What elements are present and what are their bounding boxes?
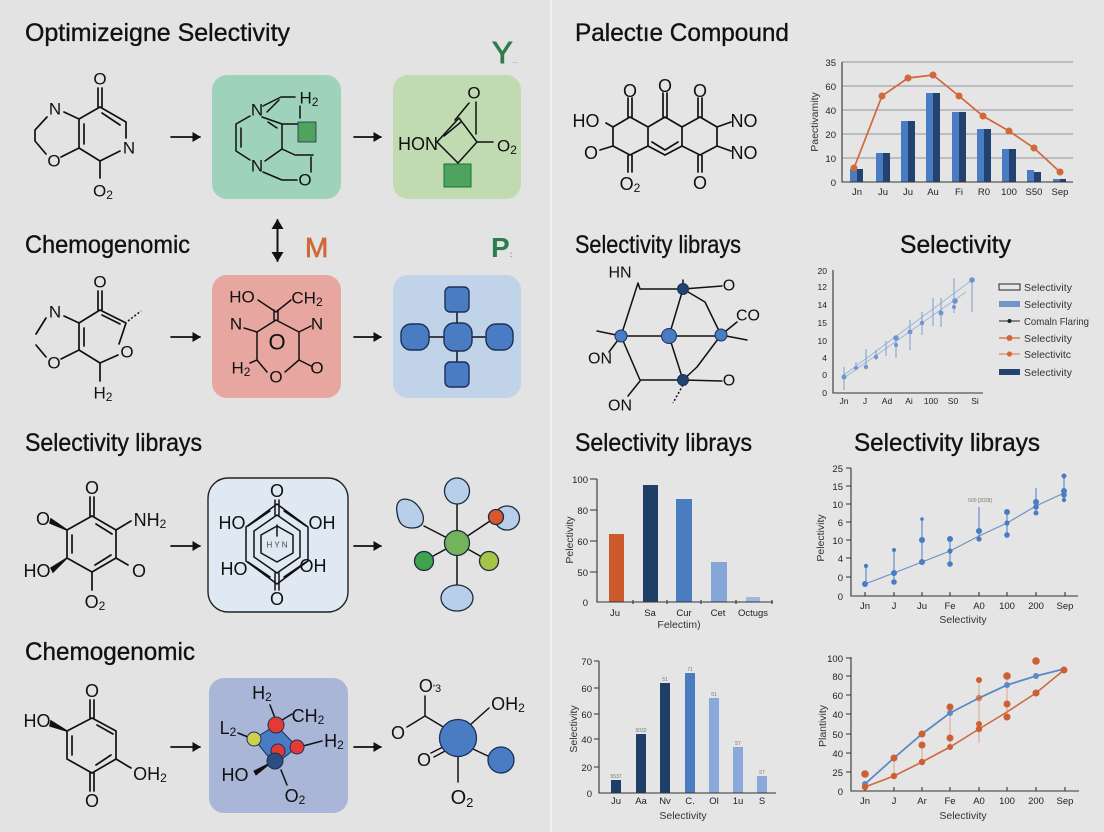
panel: green compound box: O: [298, 170, 312, 190]
arrow: green box to light green box: [354, 136, 381, 138]
chart: two-series line chart: Jn: [860, 796, 870, 807]
molecule: row 4 starting compound: O: [85, 681, 99, 701]
panel: periwinkle compound box: 2: [337, 738, 344, 752]
chart: five-bar chart: 100: [572, 475, 588, 486]
chart: five-bar chart: Cur: [676, 608, 692, 619]
chart: combo bar and line: 60: [825, 82, 836, 93]
chart: two-series line chart: Selectivity: [939, 810, 987, 822]
chart: combo bar and line: Ju: [878, 187, 888, 198]
chart: combo bar and line: R0: [978, 187, 990, 198]
panel: light green compound box: [393, 75, 521, 199]
chart: blue scatter with trend: Pelectivity: [815, 514, 827, 562]
chart: scatter with error bars and legend: 15: [818, 318, 827, 328]
molecule: tricyclic compound: NO: [730, 143, 758, 163]
chart: seven-bar chart: 1u: [733, 796, 743, 807]
panel: light green compound box: 2: [510, 143, 517, 157]
molecule: row 2 starting compound: O: [47, 354, 61, 372]
chart: seven-bar chart: S: [759, 796, 765, 807]
molecule: blue circle compound: O: [419, 676, 433, 696]
panel: periwinkle compound box: 2: [299, 793, 306, 807]
chart: blue scatter with trend: A0: [973, 601, 985, 612]
chart: seven-bar chart: Aa: [635, 796, 648, 807]
panel: green compound box: N: [251, 156, 263, 176]
panel: periwinkle compound box: [209, 678, 348, 813]
chart: combo bar and line: Jn: [852, 187, 862, 198]
chart: blue scatter with trend: 0: [838, 592, 843, 603]
chart: scatter with error bars and legend: J: [863, 396, 867, 406]
panel: hexagon compound box: HO: [220, 559, 248, 579]
chart: blue scatter with trend: 100: [999, 601, 1015, 612]
chart: combo bar and line: [809, 58, 1073, 198]
chart: blue scatter with trend: Selectivity: [939, 614, 987, 626]
molecule: row 4 starting compound: 2: [160, 771, 167, 785]
chart: seven-bar chart: 57: [759, 770, 765, 776]
arrow: purple box to blue molecule: [354, 746, 381, 748]
chart: two-series line chart: Plantivity: [817, 704, 829, 747]
panel: red compound box: N: [311, 314, 323, 334]
molecule: row 4 starting compound: O: [85, 791, 99, 811]
panel: hexagon compound box: HO: [218, 513, 246, 533]
molecule: blue node lattice: O: [723, 278, 735, 294]
chart: two-series line chart: 100: [999, 796, 1015, 807]
chart: two-series line chart: 80: [832, 672, 843, 683]
chart: scatter with error bars and legend: [818, 266, 1089, 406]
chart: combo bar and line: Au: [927, 187, 939, 198]
molecule: blue circle compound: O: [451, 787, 466, 809]
chart: seven-bar chart: 60: [581, 684, 592, 695]
panel: green compound box: 2: [312, 95, 319, 109]
heading: Selectivity librays middle: Selectivity librays: [575, 231, 741, 259]
chart: blue scatter with trend: [815, 464, 1078, 626]
legend: Selectivity: [1024, 282, 1073, 294]
chart: seven-bar chart: Ju: [611, 796, 621, 807]
label: Y: Y..: [492, 35, 517, 70]
chart: two-series line chart: 50: [832, 730, 843, 741]
molecule: row 1 starting compound: 2: [106, 188, 113, 202]
molecule: row 1 starting compound: O: [47, 152, 61, 170]
legend: Selectivity: [1024, 299, 1073, 311]
chart: blue scatter with trend: Jn: [860, 601, 870, 612]
panel: green compound box: N: [251, 100, 263, 120]
arrow: red box to blue box: [354, 336, 381, 338]
panel: hexagon compound box: OH: [308, 513, 336, 533]
heading: Chemogenomic row 4: Chemogenomic: [25, 638, 195, 666]
panel: hexagon compound box: O: [270, 481, 284, 501]
chart: two-series line chart: 100: [827, 654, 843, 665]
panel: red compound box: O: [310, 358, 324, 378]
chart: five-bar chart: 80: [577, 506, 588, 517]
molecule: blue circle compound: '3: [433, 683, 441, 695]
chart: scatter with error bars and legend: Si: [971, 396, 979, 406]
panel: hexagon compound box: O: [270, 589, 284, 609]
chart: blue scatter with trend: Fe: [944, 601, 956, 612]
blue series: [862, 669, 1064, 787]
molecule: green-blue node network: [397, 478, 520, 611]
molecule: tricyclic compound: O: [693, 173, 707, 193]
chart: two-series line chart: 60: [832, 691, 843, 702]
molecule: row 3 starting compound: 2: [160, 517, 167, 531]
chart: seven-bar chart: 57: [735, 741, 741, 747]
molecule: blue node lattice: HN: [608, 264, 632, 282]
heading: Chemogenomic row 2: Chemogenomic: [25, 231, 190, 259]
molecule: blue node lattice: ON: [588, 350, 612, 368]
chart: scatter with error bars and legend: 100: [924, 396, 938, 406]
legend: Selectivity: [1024, 333, 1073, 345]
molecule: blue circle compound: 2: [518, 701, 525, 715]
chart: blue scatter with trend: J: [892, 601, 897, 612]
chart: blue scatter with trend: 4: [838, 554, 843, 565]
molecule: row 1 starting compound: N: [123, 138, 135, 158]
molecule: row 4 starting compound: OH: [133, 764, 160, 784]
chart: scatter with error bars and legend: 10: [818, 336, 827, 346]
chart: two-series line chart: 40: [832, 749, 843, 760]
chart: seven-bar chart: 51: [662, 677, 668, 683]
molecule: blue node lattice: ON: [608, 398, 632, 414]
panel: hexagon compound box: [208, 478, 348, 612]
chart: five-bar chart: Pelectivity: [564, 516, 576, 564]
panel: periwinkle compound box: 2: [318, 713, 325, 727]
chart: blue scatter with trend: Ju: [917, 601, 927, 612]
legend: Selectivitc: [1024, 349, 1071, 361]
chart: five-bar chart: 0: [583, 598, 588, 609]
chart: two-series line chart: [817, 654, 1079, 822]
chart: combo bar and line: 40: [825, 106, 836, 117]
molecule: tricyclic compound: O: [658, 76, 672, 96]
chart: combo bar and line: Sep: [1052, 187, 1068, 198]
molecule: row 3 starting compound: O: [132, 561, 146, 581]
chart: five-bar chart: Octugs: [738, 608, 768, 619]
panel: periwinkle compound box: HO: [222, 765, 248, 785]
panel: periwinkle compound box: CH: [292, 706, 318, 726]
molecule: blue circle compound: O: [391, 723, 405, 743]
molecule: row 3 starting compound: O: [36, 509, 50, 529]
heading: Selectivity: Selectivity: [900, 231, 1011, 259]
heading: Palectie Compound: Palectıe Compound: [575, 19, 789, 47]
molecule: row 3 starting compound: HO: [24, 561, 50, 581]
molecule: row 1 starting compound: N: [49, 100, 61, 118]
molecule: tricyclic compound: O: [693, 81, 707, 101]
chart: scatter with error bars and legend: Jn: [840, 396, 849, 406]
molecule: row 3 starting compound: 2: [99, 599, 106, 613]
heading: Selectivity librays left: Selectivity librays: [25, 429, 202, 457]
panel: periwinkle compound box: H: [252, 683, 265, 703]
molecule: blue circle compound: O: [417, 750, 431, 770]
chart: blue scatter with trend: 0: [838, 573, 843, 584]
arrow: row 2 to red box: [171, 336, 200, 338]
chart: five-bar chart: Sa: [644, 608, 657, 619]
chart: combo bar and line: 20: [825, 130, 836, 141]
arrow: row 1 to green box: [171, 136, 200, 138]
chart: seven-bar chart: Nv: [659, 796, 671, 807]
panel: green compound box: H: [300, 88, 312, 108]
molecule: blue node lattice: [588, 264, 760, 414]
chart: combo bar and line: 100: [1001, 187, 1017, 198]
panel: periwinkle compound box: 2: [265, 690, 272, 704]
chart: blue scatter with trend: 500 [3028]: [968, 498, 992, 504]
chart: blue scatter with trend: Sep: [1057, 601, 1073, 612]
chart: seven-bar chart: [568, 657, 776, 822]
chart: five-bar chart: 60: [577, 537, 588, 548]
panel: red compound box: N: [230, 314, 242, 334]
chart: seven-bar chart: Selectivity: [659, 810, 707, 822]
molecule: row 3 starting compound: NH: [134, 510, 160, 530]
molecule: row 1 starting compound: O: [93, 182, 106, 200]
chart: blue scatter with trend: 15: [832, 482, 843, 493]
molecule: tricyclic compound: [572, 76, 758, 195]
chart: scatter with error bars and legend: 20: [818, 266, 827, 276]
chart: seven-bar chart: 20: [581, 763, 592, 774]
chart: two-series line chart: Fe: [944, 796, 956, 807]
molecule: row 1 starting compound: O: [93, 70, 107, 88]
chart: combo bar and line: Ju: [903, 187, 913, 198]
chart: seven-bar chart: 5537: [610, 774, 622, 780]
chart: scatter with error bars and legend: 4: [822, 353, 827, 363]
chart: two-series line chart: 25: [832, 768, 843, 779]
arrow: bidirectional vertical: [276, 220, 278, 261]
chart: combo bar and line: Fi: [955, 187, 963, 198]
label: M: M: [305, 232, 328, 263]
panel: periwinkle compound box: L: [220, 718, 230, 738]
arrow: row 3 to hexagon box: [171, 545, 200, 547]
molecule: row 2 starting compound: O: [93, 272, 107, 292]
panel: red compound box: HO: [229, 288, 255, 306]
chart: two-series line chart: Sep: [1057, 796, 1073, 807]
molecule: row 1 starting compound: [35, 70, 135, 202]
arrow: row 4 to purple box: [171, 746, 200, 748]
chart: blue scatter with trend: 200: [1028, 601, 1044, 612]
chart: scatter with error bars and legend: 14: [818, 300, 827, 310]
chart: five-bar chart: [564, 475, 773, 631]
chart: combo bar and line: S50: [1026, 187, 1042, 198]
orange series: [861, 657, 1068, 790]
arrow: hexagon box to network: [354, 545, 381, 547]
chart: two-series line chart: 200: [1028, 796, 1044, 807]
chart: seven-bar chart: 0: [587, 789, 592, 800]
chart: seven-bar chart: Ol: [709, 796, 719, 807]
panel: periwinkle compound box: H: [324, 731, 337, 751]
molecule: row 2 starting compound: H: [94, 384, 106, 402]
chart: scatter with error bars and legend: S0: [948, 396, 958, 406]
molecule: tricyclic compound: O: [584, 143, 598, 163]
molecule: row 4 starting compound: HO: [24, 711, 50, 731]
orange line series: [850, 72, 1064, 176]
chart: seven-bar chart: 71: [687, 667, 693, 673]
legend: Comaln Flaring: [1024, 316, 1089, 328]
chart: blue scatter with trend: 10: [832, 536, 843, 547]
molecule: row 4 starting compound: [24, 681, 167, 811]
heading: Selectivity librays fourth: Selectivity librays: [854, 429, 1040, 457]
chart: scatter with error bars and legend: 0: [822, 388, 827, 398]
panel: hexagon compound box: OH: [300, 556, 326, 576]
panel: blue node diagram box: [393, 275, 521, 398]
legend: [999, 282, 1089, 379]
chart: blue scatter with trend: 10: [832, 500, 843, 511]
molecule: row 2 starting compound: 2: [106, 390, 113, 404]
panel: periwinkle compound box: O: [285, 786, 299, 806]
panel: red compound box: O: [268, 330, 286, 354]
chart: blue scatter with trend: 6: [838, 518, 843, 529]
panel: red compound box: CH: [291, 288, 316, 308]
panel: periwinkle compound box: 2: [230, 725, 237, 739]
chart: scatter with error bars and legend: 0: [822, 370, 827, 380]
chart: two-series line chart: J: [892, 796, 897, 807]
chart: two-series line chart: 0: [838, 787, 843, 798]
panel: red compound box: O: [269, 368, 283, 386]
panel: light green compound box: HON: [398, 134, 438, 154]
panel: green compound box: [212, 75, 341, 199]
chart: combo bar and line: 0: [831, 178, 836, 189]
panel: light green compound box: O: [467, 84, 481, 102]
chart: five-bar chart: Felectim): [657, 619, 701, 631]
molecule: tricyclic compound: HO: [572, 111, 600, 131]
chart: seven-bar chart: 51: [711, 692, 717, 698]
molecule: blue node lattice: CO: [736, 308, 760, 324]
molecule: row 2 starting compound: O: [120, 342, 134, 362]
chart: combo bar and line: Paectivamity: [809, 91, 821, 152]
chart: scatter with error bars and legend: 12: [818, 282, 827, 292]
molecule: tricyclic compound: 2: [634, 181, 641, 195]
chart: combo bar and line: 10: [825, 154, 836, 165]
chart: two-series line chart: A0: [973, 796, 985, 807]
chart: scatter with error bars and legend: Ai: [905, 396, 913, 406]
chart: seven-bar chart: 40: [581, 735, 592, 746]
chart: blue scatter with trend: 25: [832, 464, 843, 475]
molecule: blue node lattice: O: [723, 372, 735, 390]
molecule: tricyclic compound: NO: [730, 111, 758, 131]
panel: red compound box: [212, 275, 341, 398]
chart: seven-bar chart: 5032: [635, 728, 647, 734]
chart: seven-bar chart: 60: [581, 710, 592, 721]
heading: Optimizeigne Selectivity: Optimizeigne Selectivity: [25, 19, 290, 47]
panel: light green compound box: O: [497, 136, 510, 156]
molecule: tricyclic compound: O: [623, 81, 637, 101]
chart: two-series line chart: 40: [832, 710, 843, 721]
chart: five-bar chart: Ju: [610, 608, 620, 619]
chart: seven-bar chart: C.: [685, 796, 695, 807]
molecule: blue circle compound: OH: [491, 694, 518, 714]
panel: red compound box: H: [232, 358, 244, 378]
legend: Selectivity: [1024, 367, 1073, 379]
molecule: row 3 starting compound: [24, 478, 167, 613]
chart: five-bar chart: 50: [577, 568, 588, 579]
label: P: P:: [491, 232, 512, 263]
chart: scatter with error bars and legend: Ad: [882, 396, 892, 406]
chart: two-series line chart: Ar: [917, 796, 927, 807]
molecule: row 3 starting compound: O: [85, 478, 99, 498]
molecule: row 2 starting compound: [36, 272, 141, 404]
bars: [850, 93, 1066, 182]
molecule: blue circle compound: [391, 676, 525, 810]
chart: seven-bar chart: 70: [581, 657, 592, 668]
molecule: row 2 starting compound: N: [49, 302, 61, 322]
molecule: row 3 starting compound: O: [85, 592, 99, 612]
heading: Selectivity librays third: Selectivity librays: [575, 429, 752, 457]
molecule: blue circle compound: 2: [466, 794, 473, 810]
chart: five-bar chart: Cet: [711, 608, 726, 619]
chart: combo bar and line: 35: [825, 58, 836, 69]
panel: red compound box: 2: [316, 295, 323, 309]
molecule: tricyclic compound: O: [620, 174, 634, 194]
panel: hexagon compound box: H Y N: [266, 540, 288, 550]
panel: red compound box: 2: [244, 365, 251, 379]
chart: seven-bar chart: Selectivity: [568, 705, 580, 753]
